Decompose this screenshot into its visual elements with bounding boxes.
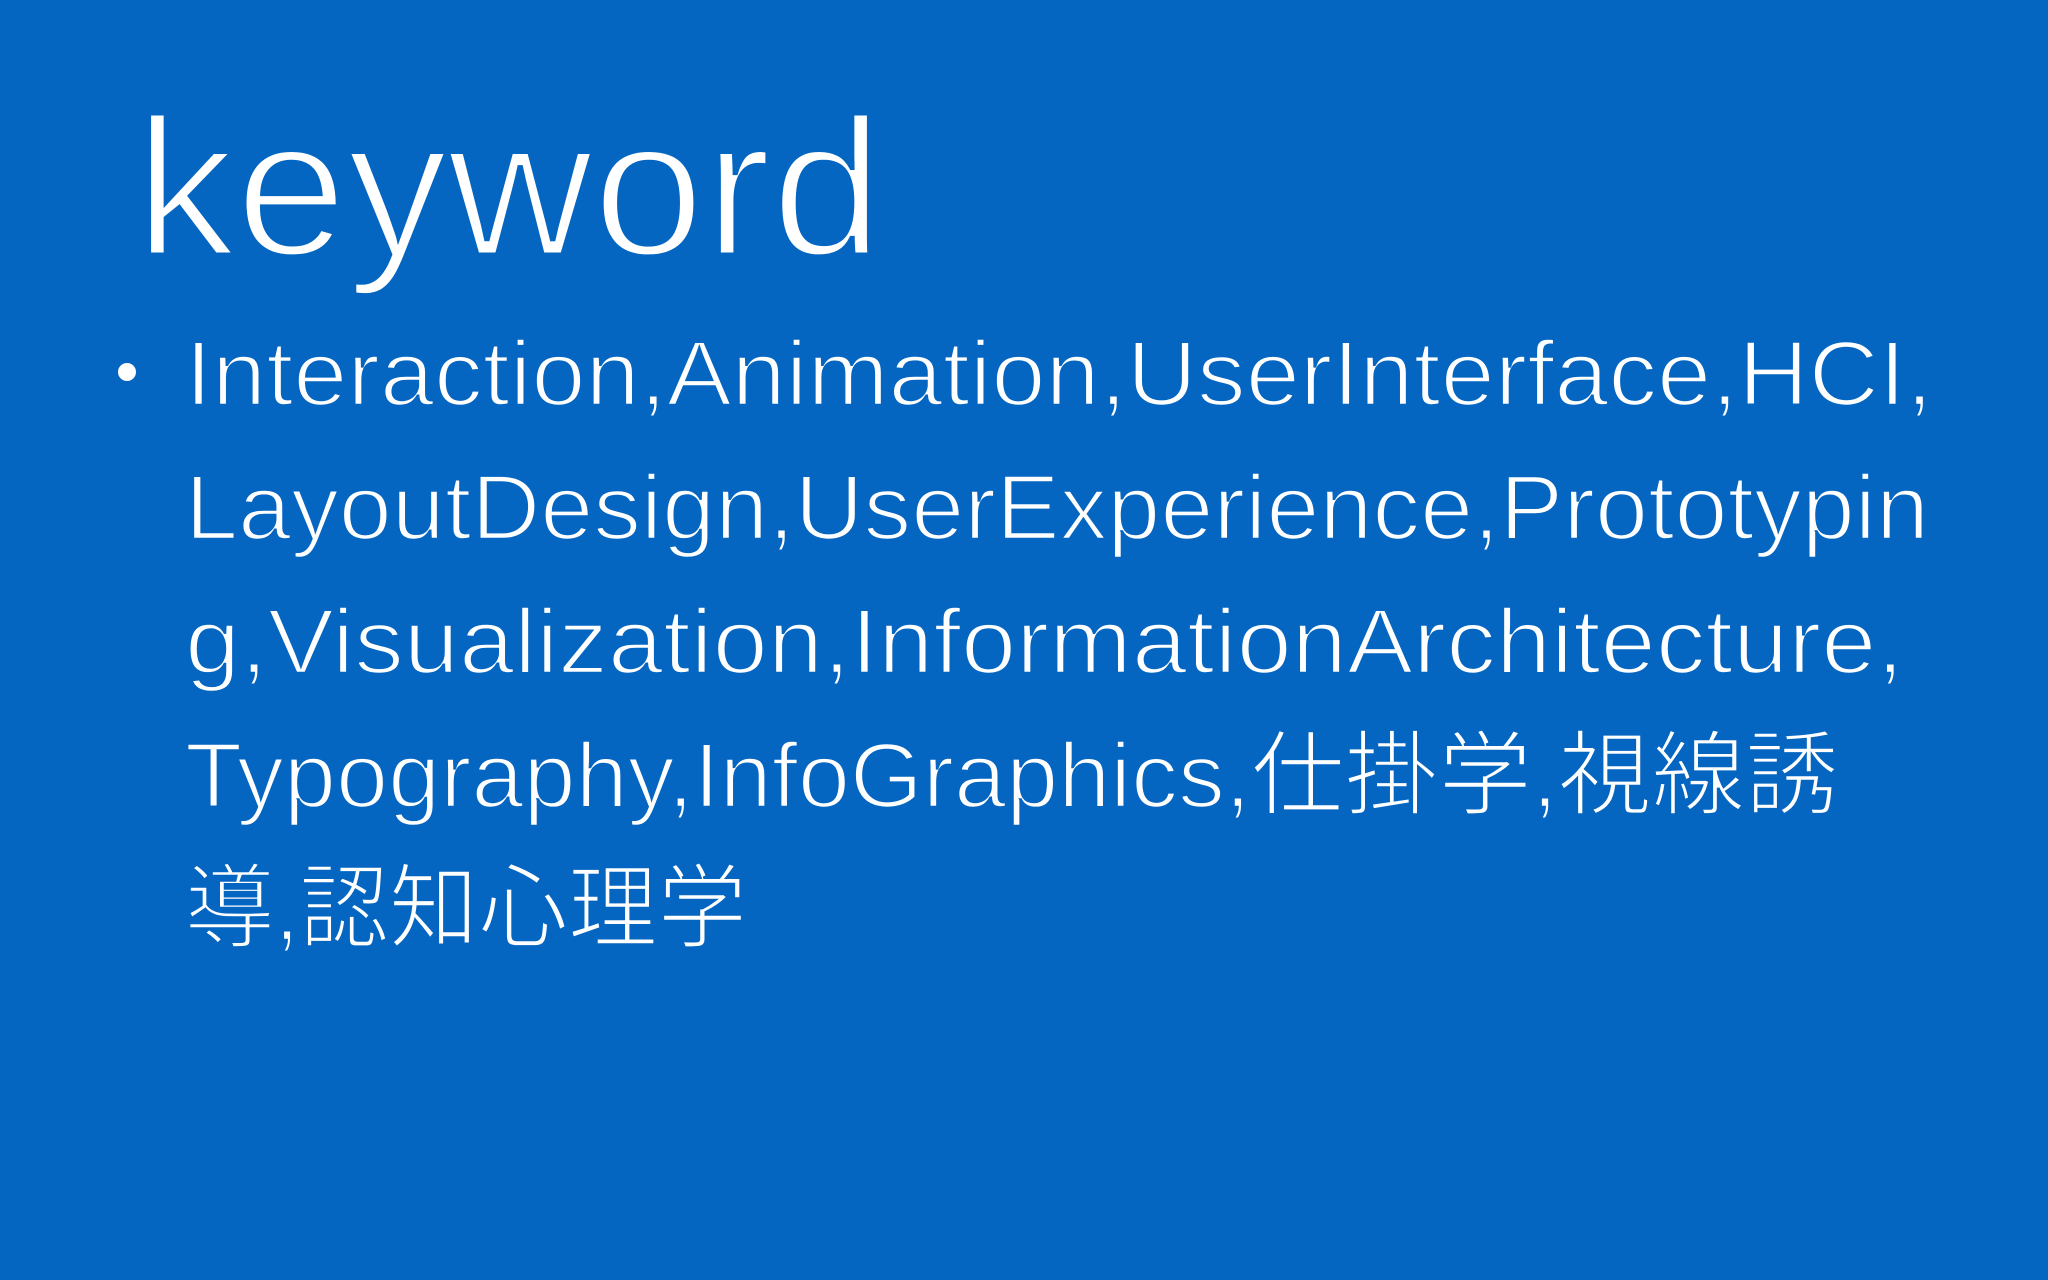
line 1: Interaction,Animation,UserInterface,HCI, — [185, 323, 1933, 425]
bullet — [118, 363, 136, 381]
line 3: g,Visualization,InformationArchitecture, — [185, 591, 1904, 693]
title: keyword — [135, 78, 883, 297]
line 2: LayoutDesign,UserExperience,Prototypin — [185, 457, 1929, 559]
line 4: Typography,InfoGraphics,仕掛学,視線誘 — [185, 725, 1839, 827]
keyword list — [118, 323, 1933, 960]
line 5: 導,認知心理学 — [185, 858, 747, 960]
